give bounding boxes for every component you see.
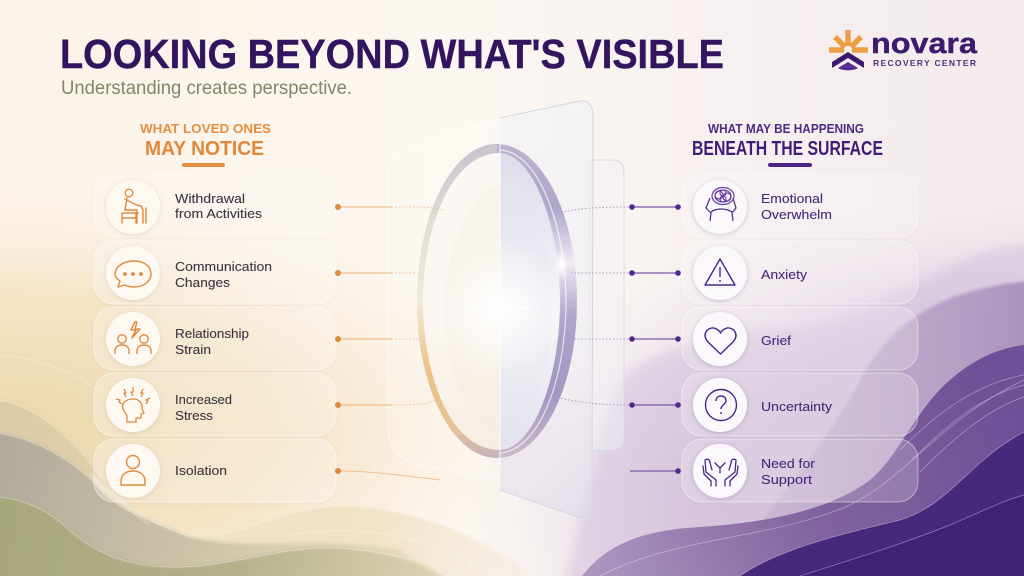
right heading xyxy=(692,121,883,167)
heading line 2: BENEATH THE SURFACE xyxy=(692,138,883,160)
heading line 1: WHAT MAY BE HAPPENING xyxy=(708,121,864,136)
logo: Novara Recovery Center xyxy=(829,28,978,70)
card: grief xyxy=(682,307,918,370)
glass panel: left xyxy=(388,118,500,480)
label: Relationship xyxy=(175,326,249,341)
card: communication changes xyxy=(94,240,336,304)
label: Grief xyxy=(761,333,791,348)
label: from Activities xyxy=(175,206,263,221)
label: Uncertainty xyxy=(761,399,833,414)
title: LOOKING BEYOND WHAT'S VISIBLE xyxy=(60,31,724,77)
label: Stress xyxy=(175,408,214,423)
card: emotional overwhelm xyxy=(682,174,918,237)
label: Strain xyxy=(175,342,211,357)
heading line 2: MAY NOTICE xyxy=(145,138,264,160)
label: Increased xyxy=(175,392,232,407)
label: Anxiety xyxy=(761,267,808,282)
card: anxiety xyxy=(682,241,918,304)
label: Need for xyxy=(761,456,816,471)
panel: what loved ones may notice xyxy=(94,173,336,502)
glass panel: front right xyxy=(500,101,593,517)
icon: open hands xyxy=(703,459,738,486)
label: Overwhelm xyxy=(761,207,832,222)
heading line 1: WHAT LOVED ONES xyxy=(140,121,271,136)
card: need for support xyxy=(682,439,918,502)
icon: sun and chevrons xyxy=(829,30,868,70)
card: uncertainty xyxy=(682,373,918,436)
wordmark: novara xyxy=(871,28,978,60)
label: Changes xyxy=(175,275,231,290)
left connectors xyxy=(335,204,445,480)
icon: head with stress bolts xyxy=(116,387,150,422)
icon: question circle xyxy=(706,390,736,420)
icon: seated person xyxy=(122,189,146,223)
central lens with glass panels xyxy=(388,101,624,517)
right connectors xyxy=(555,204,681,474)
icon: heart xyxy=(705,328,736,354)
label: Withdrawal xyxy=(175,191,245,206)
tagline: RECOVERY CENTER xyxy=(873,58,976,68)
icon: head with tangled thoughts xyxy=(706,188,736,221)
icon: warning triangle xyxy=(705,259,735,285)
label: Emotional xyxy=(761,191,823,206)
label: Support xyxy=(761,472,812,487)
card: increased stress xyxy=(94,373,336,436)
card: relationship strain xyxy=(94,307,336,370)
label: Isolation xyxy=(175,463,227,478)
lens ring xyxy=(417,144,577,458)
card: isolation xyxy=(94,439,336,502)
label: Communication xyxy=(175,259,272,274)
subtitle: Understanding creates perspective. xyxy=(61,78,352,99)
card: withdrawal from activities xyxy=(94,173,336,237)
left heading xyxy=(140,121,271,167)
glass panel: back right xyxy=(590,160,624,450)
icon: speech bubble xyxy=(115,261,151,287)
panel: what may be happening beneath the surface xyxy=(682,174,918,502)
icon: two people with lightning xyxy=(115,322,151,354)
icon: person xyxy=(121,456,145,485)
lens glass xyxy=(423,118,568,490)
